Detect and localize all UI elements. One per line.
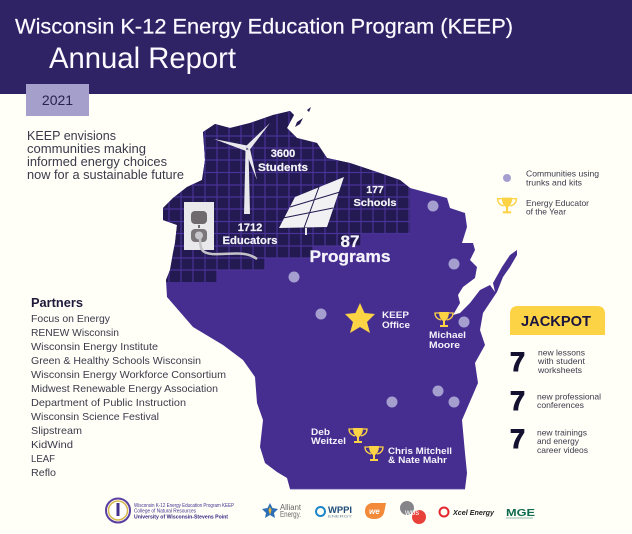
subtitle: Annual Report: [49, 42, 237, 75]
jackpot item: conferences: [510, 386, 601, 416]
footer logo: Xcel Energy: [440, 508, 495, 517]
jackpot item: videos: [510, 424, 588, 455]
legend: educator text: Energy Educator: [526, 198, 589, 208]
partners list: Reflo: [31, 467, 56, 479]
statistic: programs: 87: [341, 232, 359, 251]
legend: communities text: [526, 168, 599, 188]
statistic: schools: 177: [366, 184, 384, 196]
label: Deb Weitzel: Weitzel: [311, 436, 346, 447]
partners list: Wisconsin Energy Workforce Consortium: [31, 369, 226, 381]
footer logo: We Energies: [365, 503, 386, 519]
jackpot item: lessons: worksheets: [537, 365, 582, 375]
legend: communities text: trunks and kits: [526, 178, 582, 188]
label: Michael Moore: Michael: [429, 330, 466, 341]
footer logo: WPS: [400, 501, 426, 524]
partners heading: Partners: [31, 296, 83, 310]
footer logo: We Energies: we: [369, 507, 380, 516]
jackpot item: lessons: with student: [537, 356, 586, 366]
map of Wisconsin: [150, 100, 517, 489]
partners list: RENEW Wisconsin: [31, 327, 119, 339]
label: Chris Mitchell and Nate Mahr: & Nate Mahr: [388, 455, 447, 466]
trophy: Michael Moore: [435, 312, 453, 327]
label: Chris Mitchell and Nate Mahr: Chris Mitchell: [388, 446, 452, 457]
statistic: educators: [222, 222, 278, 247]
footer logo: WPS: wps: [404, 508, 419, 517]
partners list: Wisconsin Energy Institute: [31, 341, 158, 353]
legend: [498, 168, 599, 216]
jackpot heading: JACKPOT: [521, 313, 591, 330]
label: Chris Mitchell and Nate Mahr: [388, 446, 452, 466]
statistic: students: 3600: [271, 148, 295, 160]
partners list: Focus on Energy: [31, 313, 111, 325]
year badge: [26, 84, 89, 116]
legend: communities dot: [503, 174, 511, 182]
islands: [295, 107, 311, 127]
partners list: Midwest Renewable Energy Association: [31, 383, 218, 395]
trophy: Chris Mitchell and Nate Mahr: [365, 446, 383, 461]
label: Michael Moore: [429, 330, 466, 351]
footer logo: WPPI Energy: WPPI: [328, 505, 352, 515]
KEEP office label: [382, 310, 410, 331]
jackpot heading: [510, 306, 605, 335]
vision statement: KEEP envisions: [27, 129, 116, 143]
partners list: [31, 296, 226, 479]
jackpot item: lessons: [510, 347, 586, 377]
label: Deb Weitzel: Deb: [311, 427, 330, 438]
jackpot item: conferences: 7: [510, 386, 525, 416]
footer logo: university seal: [106, 498, 234, 522]
legend: educator text: [526, 198, 589, 216]
title: Wisconsin K-12 Energy Education Program (KEEP): [15, 16, 513, 38]
icon: solar panel: [279, 177, 344, 235]
vision statement: communities making: [27, 142, 146, 156]
legend: educator text: of the Year: [526, 206, 566, 216]
statistic: students: Students: [258, 162, 308, 174]
partners list: LEAF: [31, 453, 55, 465]
legend: trophy: [498, 198, 516, 213]
jackpot item: videos: and energy: [537, 436, 580, 446]
jackpot item: videos: career videos: [537, 445, 588, 455]
footer logo: Alliant Energy: Alliant: [280, 503, 302, 512]
footer logo: MGE: MGE: [506, 508, 535, 519]
jackpot item: videos: new trainings: [537, 428, 587, 438]
statistic: educators: 1712: [238, 222, 262, 234]
KEEP office label: Office: [382, 320, 410, 331]
energy grid region: [163, 111, 410, 282]
vision statement: now for a sustainable future: [27, 168, 184, 182]
trophy: Deb Weitzel: [349, 428, 367, 443]
icon: KEEP office star: [345, 303, 375, 333]
statistic: educators: Educators: [222, 235, 278, 247]
statistic: students: [258, 148, 308, 174]
statistic: schools: Schools: [354, 197, 397, 209]
jackpot item: lessons: 7: [510, 347, 525, 377]
jackpot item: conferences: conferences: [537, 400, 584, 410]
year badge: 2021: [42, 92, 73, 108]
icon: wall outlet: [184, 202, 257, 259]
vision statement: informed energy choices: [27, 155, 167, 169]
statistic: schools: [354, 184, 397, 209]
label: Deb Weitzel: [311, 427, 346, 447]
footer logo: university seal: University of Wisconsin-Stevens Point: [134, 514, 228, 520]
statistic: programs: Programs: [310, 247, 390, 266]
jackpot item: lessons: new lessons: [538, 348, 585, 358]
partners list: Green & Healthy Schools Wisconsin: [31, 355, 201, 367]
icon: wind turbine: [214, 123, 270, 214]
partners list: Slipstream: [31, 425, 82, 437]
label: Michael Moore: Moore: [429, 340, 460, 351]
partners list: Wisconsin Science Festival: [31, 411, 159, 423]
footer logo: university seal: College of Natural Resources: [134, 508, 196, 514]
vision statement: [27, 129, 184, 182]
partners list: KidWind: [31, 439, 73, 451]
footer logo: WPPI Energy: ENERGY: [328, 514, 352, 518]
legend: communities text: Communities using: [526, 168, 599, 178]
KEEP office label: KEEP: [382, 310, 410, 321]
statistic: programs: [310, 232, 390, 266]
header band: [0, 0, 632, 94]
jackpot item: videos: 7: [510, 424, 525, 454]
footer logo: WPPI Energy: [316, 505, 352, 518]
jackpot item: conferences: new professional: [537, 392, 601, 402]
footer logo: Xcel Energy: Xcel Energy: [452, 510, 495, 517]
footer logo: university seal: Wisconsin K-12 Energy Education Program KEEP: [134, 503, 234, 509]
footer logo: Alliant Energy: [262, 503, 302, 519]
partners list: Department of Public Instruction: [31, 397, 186, 409]
community dots: [288, 200, 470, 408]
footer logo: Alliant Energy: Energy.: [280, 510, 301, 519]
